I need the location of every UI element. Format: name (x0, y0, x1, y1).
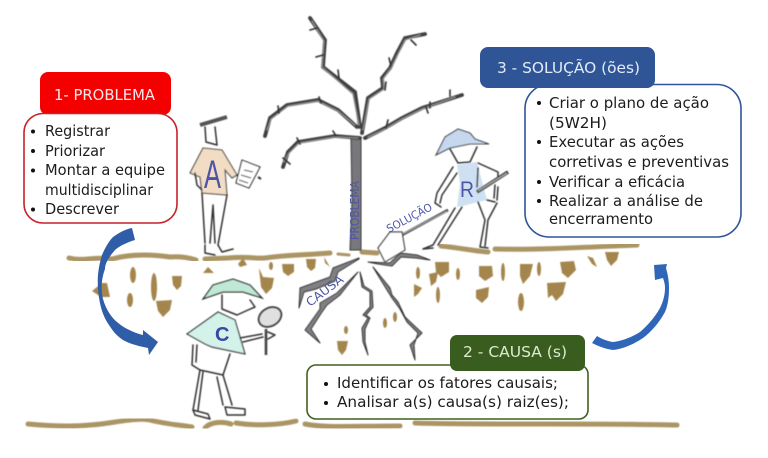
heading: solução: 3 - SOLUÇÃO (ões) (497, 58, 640, 77)
list: problema (24, 114, 177, 223)
list: solução (525, 84, 741, 237)
list: causa (307, 365, 588, 419)
figure R with shovel (378, 129, 508, 262)
arrow: cause to solution (592, 264, 669, 350)
heading: problema: 1- PROBLEMA (54, 86, 156, 104)
arrow: problem to cause (98, 228, 158, 355)
list: problema: Registrar (45, 122, 111, 140)
heading: solução (480, 47, 655, 88)
list: problema: Descrever (45, 200, 120, 218)
figure C with magnifier (187, 279, 285, 419)
figure A (190, 117, 261, 255)
letter A: A (204, 153, 221, 197)
list: solução: Verificar a eficácia (549, 173, 685, 191)
list: problema: multidisciplinar (45, 181, 154, 199)
panel: problema (24, 72, 177, 223)
list: solução: Criar o plano de ação (549, 94, 709, 112)
list: solução: (5W2H) (549, 114, 607, 132)
tree with branches (265, 18, 462, 250)
letter R: R (460, 177, 474, 202)
heading: causa (450, 335, 585, 371)
label: SOLUÇÃO on shovel: SOLUÇÃO (384, 201, 435, 236)
label: CAUSA on root: CAUSA (303, 272, 347, 309)
list: problema: Priorizar (45, 142, 106, 160)
list: solução: Realizar a análise de (549, 192, 703, 210)
upper ground line (69, 245, 637, 260)
list: problema: Montar a equipe (45, 161, 165, 179)
roots (299, 253, 430, 360)
heading: causa: 2 - CAUSA (s) (463, 343, 567, 361)
list: solução: Executar as ações (549, 133, 684, 151)
heading: problema (40, 72, 171, 115)
list: solução: encerramento (549, 210, 653, 228)
lower ground line (28, 419, 677, 428)
soil patches (92, 252, 619, 355)
panel: solução (480, 47, 741, 237)
list: solução: corretivas e preventivas (549, 153, 729, 171)
list: causa: Identificar os fatores causais; (337, 374, 558, 392)
list: causa: Analisar a(s) causa(s) raiz(es); (337, 393, 569, 411)
letter C: C (215, 324, 229, 346)
label: PROBLEMA on trunk: PROBLEMA (348, 180, 362, 240)
panel: causa (307, 335, 588, 419)
